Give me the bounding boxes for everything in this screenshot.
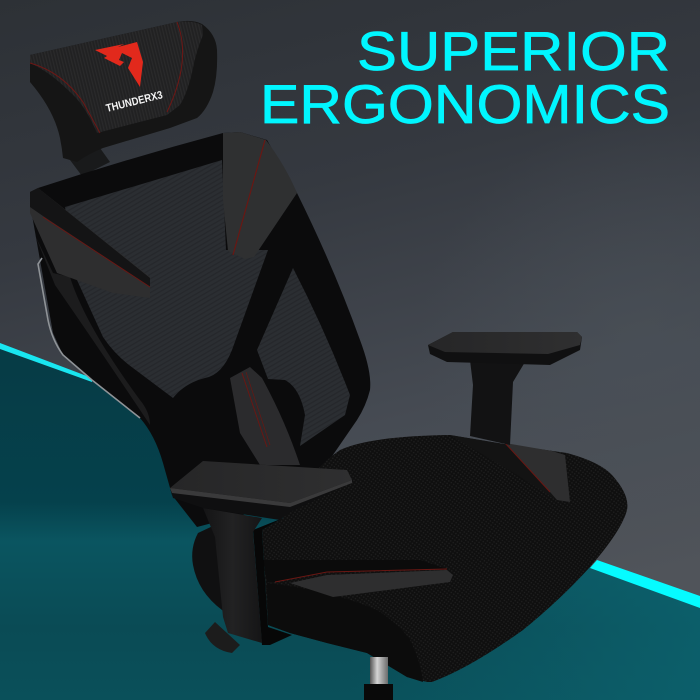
- rear armrest: [428, 332, 582, 445]
- mesh panel lower right: [257, 268, 350, 446]
- gas lift cylinder: [364, 657, 393, 700]
- seat rear insert: [450, 435, 570, 502]
- inner frame strip: [35, 235, 150, 425]
- logo wordmark: THUNDERX3: [105, 89, 164, 115]
- title: ERGONOMICS: [260, 73, 670, 135]
- left wing insert: [30, 188, 150, 298]
- title: SUPERIOR: [357, 20, 670, 82]
- seat cushion: [262, 435, 627, 682]
- armrest pad: [170, 461, 353, 520]
- headrest post: [70, 148, 110, 176]
- armrest lever: [205, 622, 240, 653]
- lumbar support: [230, 367, 300, 465]
- left cushion: [192, 525, 240, 620]
- backrest frame: [30, 132, 370, 527]
- silver frame edge: [38, 258, 140, 418]
- cyan floor line: [0, 343, 700, 608]
- headrest: [30, 21, 217, 162]
- armrest post: [203, 508, 262, 643]
- armrest bracket: [253, 518, 292, 645]
- right wing insert: [223, 132, 297, 259]
- mesh panel upper: [65, 160, 268, 398]
- title: [260, 20, 670, 135]
- logo emblem: [95, 42, 143, 87]
- seat front roll: [267, 583, 423, 682]
- front armrest: [170, 461, 353, 653]
- teal floor: [0, 347, 700, 700]
- seat front insert: [263, 560, 453, 597]
